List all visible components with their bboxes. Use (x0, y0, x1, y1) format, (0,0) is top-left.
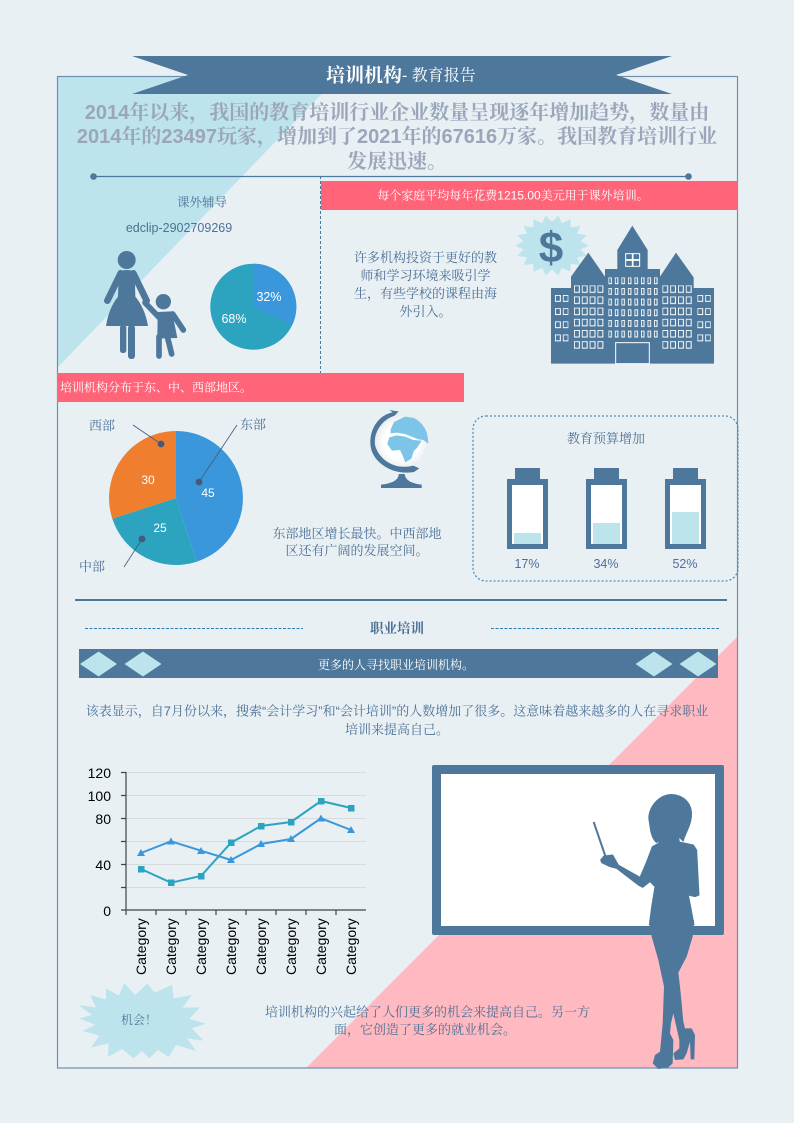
line chart: 0 (103, 903, 111, 919)
pie chart: regions (79, 417, 266, 574)
pie chart: 32 / 68 (210, 264, 296, 350)
heading: budget: 教育预算增加 (567, 431, 645, 446)
text: investment: 生，有些学校的课程由海 (354, 286, 497, 302)
line chart: Category (163, 918, 179, 975)
callout: regions (57, 373, 464, 402)
battery 52% (665, 468, 706, 571)
text: conclusion (265, 1004, 590, 1038)
pie chart: regions: 30 (141, 473, 155, 487)
battery 34%: 34% (593, 557, 619, 571)
line chart: Category (283, 918, 299, 975)
icon: school building (551, 226, 714, 364)
heading: vocational training: 职业培训 (370, 620, 424, 636)
line chart (88, 765, 366, 975)
text: regional growth: 东部地区增长最快。中西部地 (272, 526, 442, 541)
text: search trend (86, 704, 708, 737)
text: search trend: 该表显示，自7月份以来，搜索“会计学习”和“会计培训”的人数增加了很多。这意味着越来越多的人在寻求职业 (86, 704, 708, 720)
title banner: 培训机构- 教育报告 (326, 64, 476, 86)
text: investment (354, 250, 497, 319)
callout: family spending: 每个家庭平均每年花费1215.00美元用于课外培训。 (377, 188, 649, 202)
text: investment: 师和学习环境来吸引学 (360, 268, 491, 283)
intro text (77, 100, 717, 173)
heading: tutoring: 课外辅导 (177, 194, 227, 210)
line chart: 120 (88, 765, 111, 781)
burst: opportunity (79, 983, 206, 1058)
battery 17% (507, 468, 548, 571)
line chart: Category (343, 918, 359, 975)
pie chart: regions: 东部 (240, 417, 266, 432)
pie chart: 32 / 68: 68% (221, 312, 247, 326)
text: conclusion: 面，它创造了更多的就业机会。 (334, 1022, 516, 1038)
text: investment: 外引入。 (399, 304, 452, 319)
icon: whiteboard (432, 765, 724, 935)
icon: teacher silhouette (594, 794, 699, 1069)
pie chart: 32 / 68: 32% (256, 290, 282, 304)
icon: mother and child (106, 251, 183, 359)
line chart: 80 (95, 811, 111, 827)
battery 52%: 52% (672, 557, 698, 571)
caption: clip id: edclip-2902709269 (126, 221, 232, 235)
band: more people seek training: 更多的人寻找职业培训机构。 (318, 657, 474, 672)
pie chart: regions: 25 (153, 521, 167, 535)
burst: opportunity: 机会！ (121, 1012, 157, 1027)
icon: globe (370, 410, 429, 488)
series: squares (138, 798, 354, 886)
icon: dollar burst: $ (539, 224, 563, 272)
line chart: 100 (88, 788, 111, 804)
text: regional growth (272, 526, 442, 558)
text: investment: 许多机构投资于更好的教 (354, 250, 497, 265)
text: conclusion: 培训机构的兴起给了人们更多的机会来提高自己。另一方 (265, 1004, 590, 1020)
intro text: 2014年的23497玩家，增加到了2021年的67616万家。我国教育培训行业 (77, 124, 717, 148)
text: regional growth: 区还有广阔的发展空间。 (285, 543, 429, 558)
intro divider with end dots (90, 173, 692, 180)
series: triangles (137, 814, 355, 863)
callout: family spending (321, 181, 738, 210)
callout: regions: 培训机构分布于东、中、西部地区。 (60, 380, 252, 394)
intro text: 2014年以来，我国的教育培训行业企业数量呈现逐年增加趋势，数量由 (85, 100, 709, 124)
battery 17%: 17% (514, 557, 540, 571)
band: more people seek training (79, 649, 718, 678)
line chart: Category (253, 918, 269, 975)
line chart: Category (223, 918, 239, 975)
pie chart: regions: 中部 (79, 559, 105, 574)
battery 34% (586, 468, 627, 571)
text: search trend: 培训来提高自己。 (345, 722, 449, 737)
line chart: Category (193, 918, 209, 975)
panel: education budget (473, 416, 738, 581)
intro text: 发展迅速。 (347, 150, 447, 173)
pie chart: regions: 45 (201, 486, 215, 500)
icon: dollar burst (515, 216, 589, 275)
title banner (132, 56, 672, 94)
page frame (58, 76, 738, 1068)
decorative pink triangle (306, 636, 738, 1068)
line chart: Category (133, 918, 149, 975)
line chart: Category (313, 918, 329, 975)
line chart: 40 (95, 857, 111, 873)
pie chart: regions: 西部 (89, 418, 115, 433)
decorative light blue triangle (57, 76, 339, 368)
